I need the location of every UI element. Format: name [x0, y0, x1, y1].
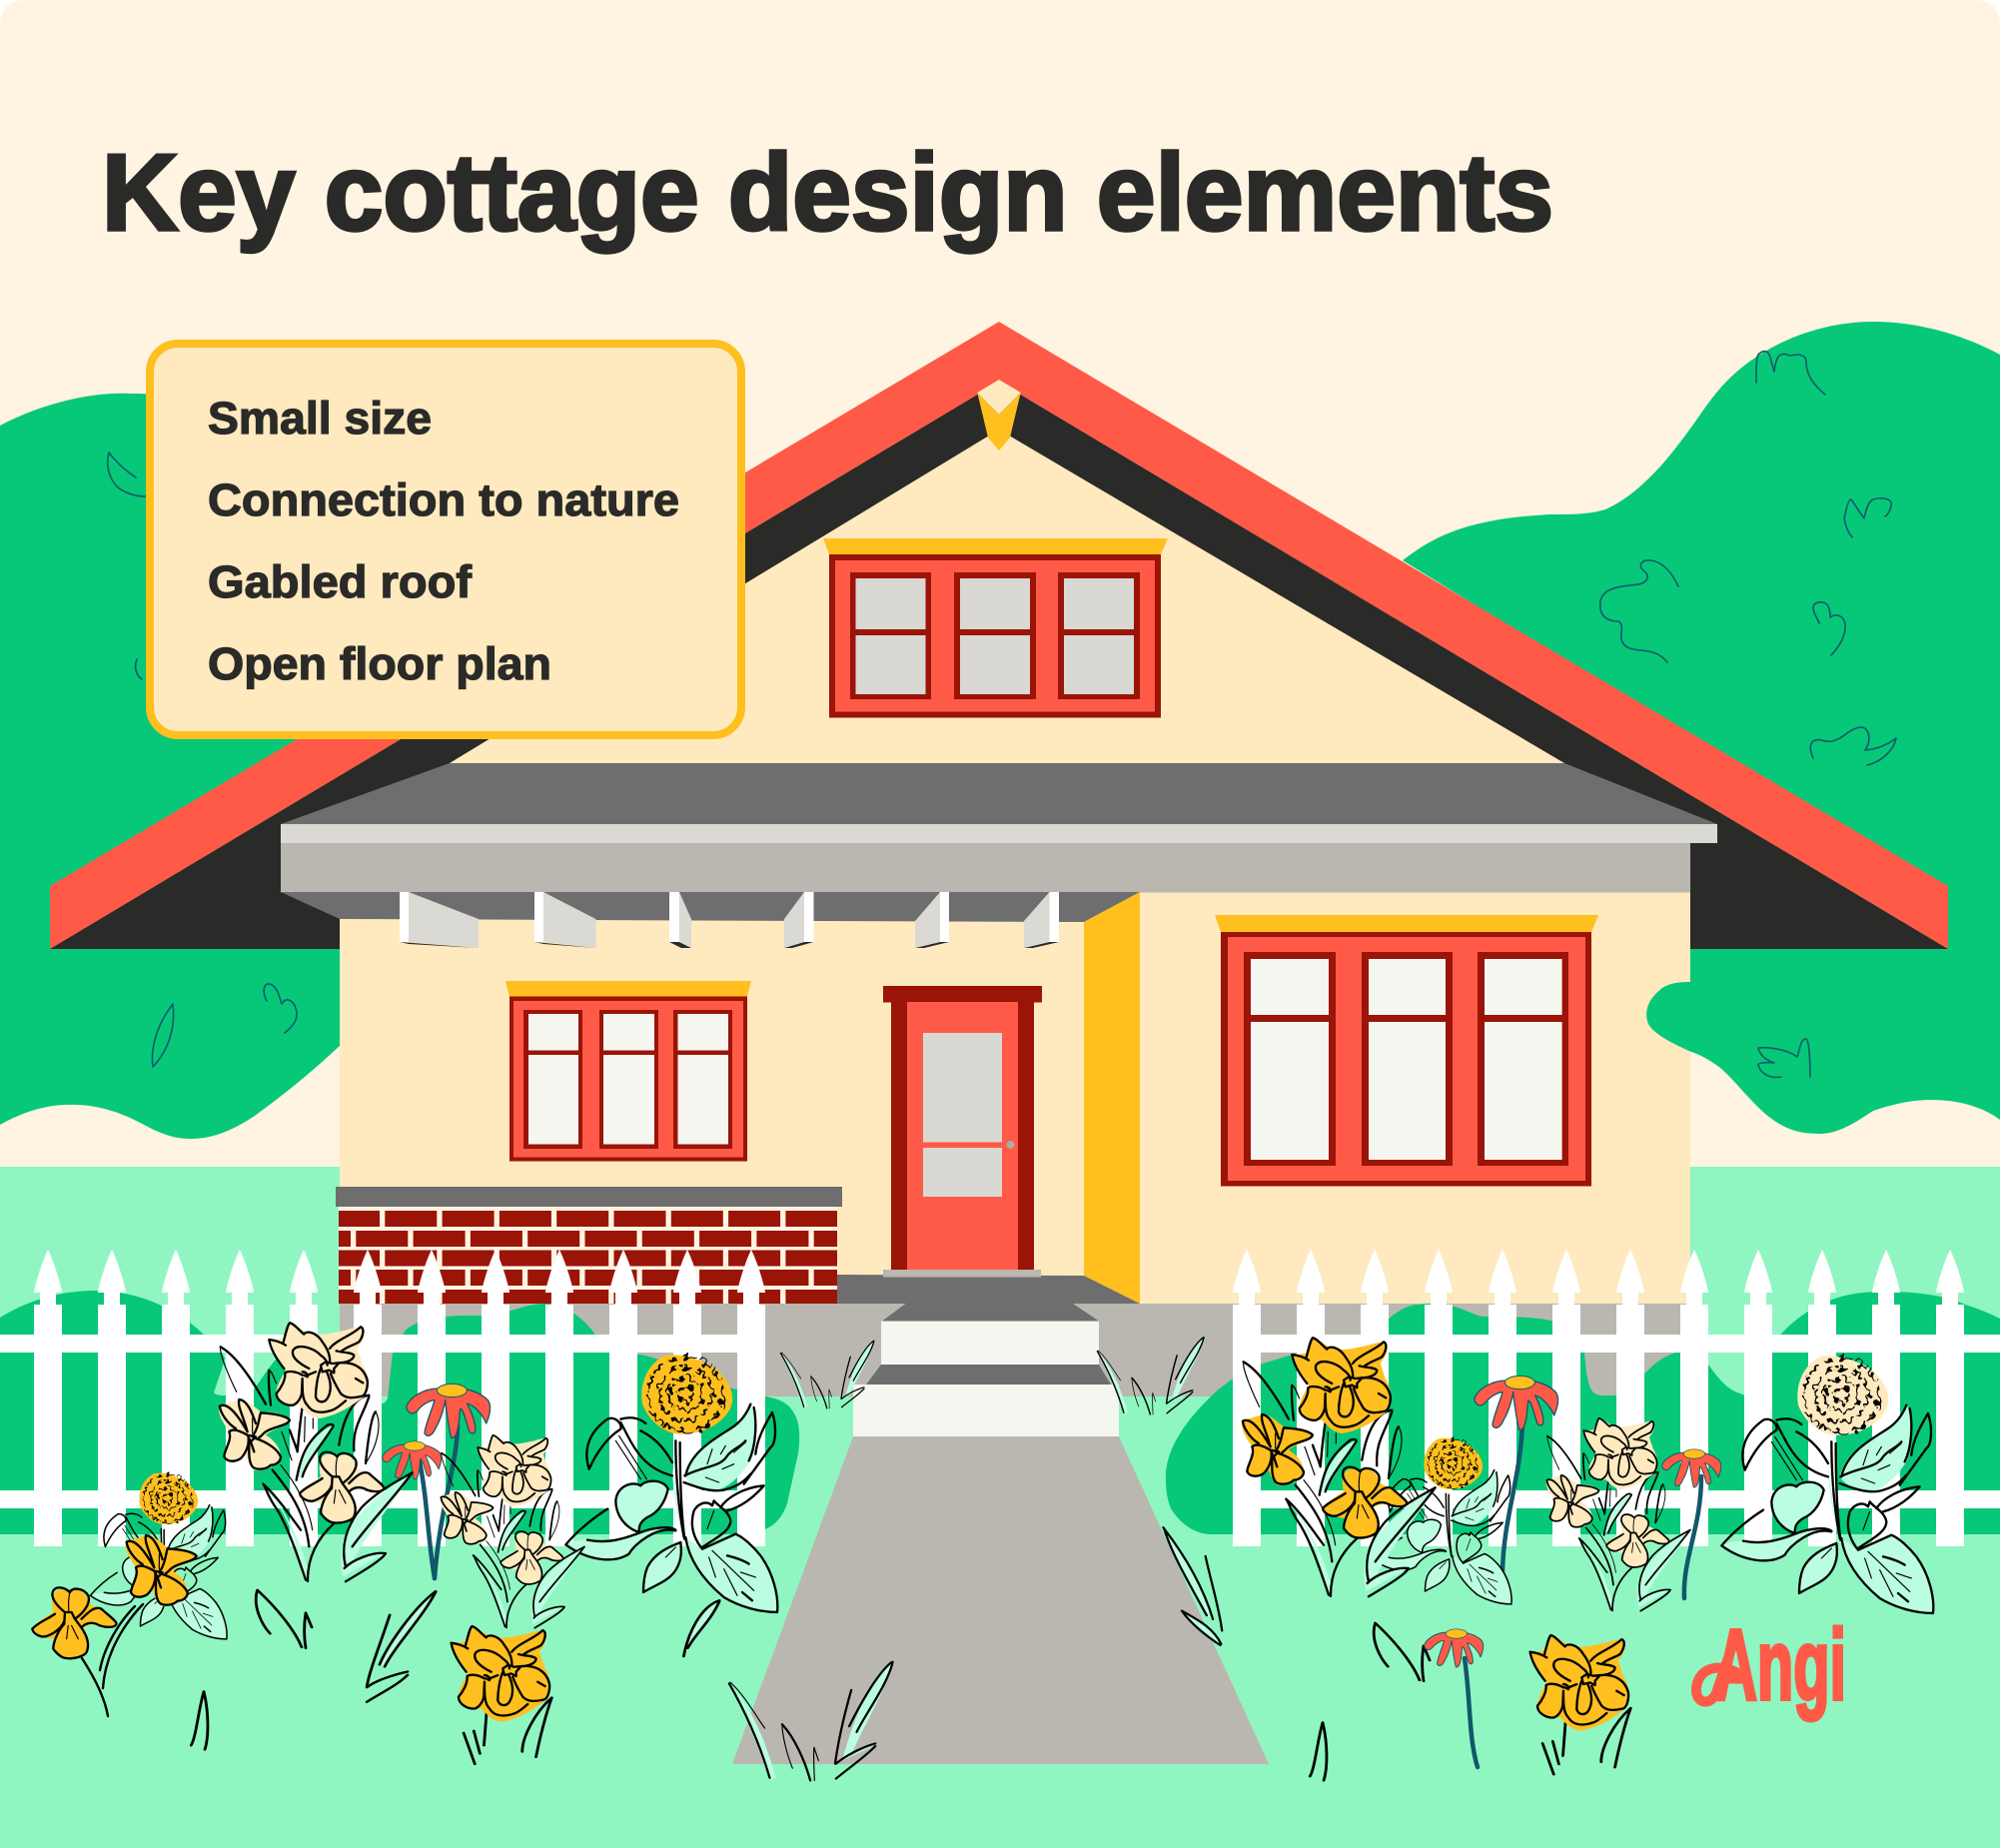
flowering plant with zinnia, right small [1375, 1438, 1511, 1604]
title: Key cottage design elements [102, 132, 1553, 254]
right background tree [1403, 322, 2000, 1134]
roof underside [50, 382, 1948, 949]
tree bulge over wall [1646, 982, 1691, 1052]
left background tree [0, 394, 599, 1139]
yellow flower, lower right [1528, 1635, 1629, 1731]
dormer window [823, 538, 1168, 717]
gable wall [450, 430, 1564, 763]
flowering plant with zinnia, left large [565, 1355, 777, 1612]
flower stems [419, 1423, 1701, 1767]
cream flower cluster, right small [1546, 1418, 1690, 1611]
left picket fence [0, 1250, 765, 1546]
callout panel [150, 344, 741, 735]
tree leaf squiggles [108, 352, 1896, 1077]
porch pillar [1084, 892, 1140, 1304]
callout item: open floor plan: Open floor plan [208, 638, 551, 689]
house wall [340, 892, 1690, 1304]
gable vent [977, 380, 1021, 451]
right window [1215, 915, 1598, 1187]
porch floor [837, 1275, 1140, 1304]
Angi logo: Angi [1714, 1609, 1846, 1721]
front bushes [0, 1291, 2000, 1534]
flowering plant with zinnia, left small [90, 1473, 227, 1639]
callout item: connection to nature: Connection to nature [208, 474, 679, 525]
red daisies [383, 1376, 1721, 1667]
Angi logo [1696, 1609, 1846, 1721]
porch steps [853, 1304, 1119, 1436]
walkway [732, 1436, 1269, 1764]
yellow flower cluster, right large [1242, 1338, 1436, 1596]
yellow pansies with stem, lower left [32, 1535, 198, 1716]
right picket fence [1233, 1250, 2000, 1546]
roof [50, 322, 1948, 949]
left window [505, 981, 751, 1161]
front door [883, 986, 1042, 1277]
yellow flower, lower left [450, 1626, 550, 1722]
lawn [0, 1167, 2000, 1848]
roof brackets [400, 892, 1059, 948]
roof red edge [50, 322, 1948, 949]
brick porch wall [336, 1187, 842, 1304]
flowering plant with zinnia, right large [1721, 1356, 1933, 1613]
porch roof [281, 763, 1717, 922]
cream flower cluster, left large [219, 1323, 413, 1581]
callout item: small size: Small size [208, 393, 432, 444]
foundation [340, 1304, 1690, 1396]
callout item: gabled roof: Gabled roof [208, 556, 473, 607]
grass tufts [191, 1337, 1630, 1780]
cream flower cluster, left small [441, 1435, 584, 1628]
